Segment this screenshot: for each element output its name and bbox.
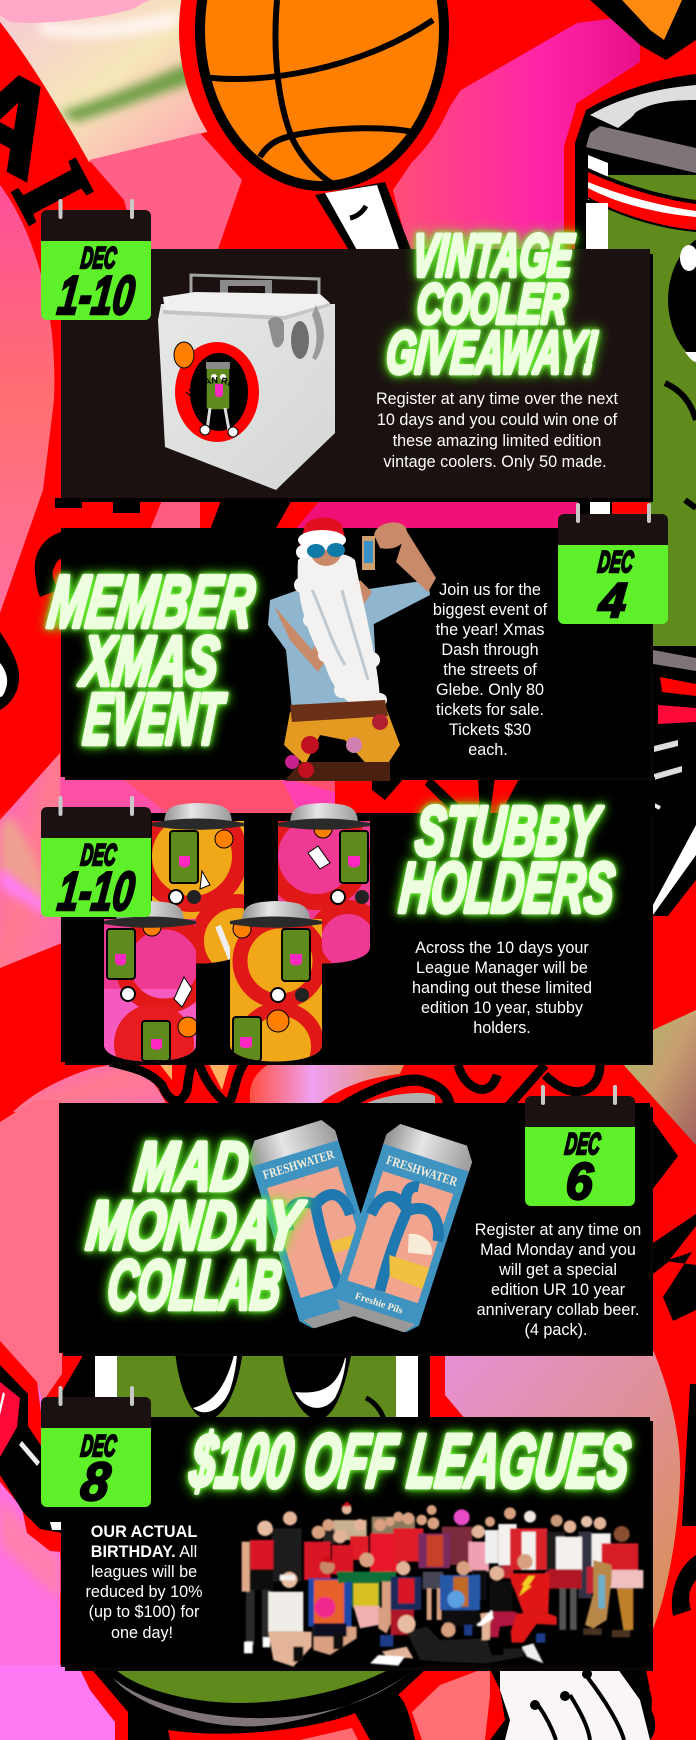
panel 3 background	[61, 813, 653, 1065]
title: vintage cooler giveaway: COOLER	[415, 272, 570, 335]
background left of panel 5	[0, 1341, 62, 1740]
calendar: dec 6: DEC	[563, 1128, 603, 1161]
text: cooler description: Register at any time over the next	[376, 390, 619, 408]
title: member xmas event	[44, 560, 260, 760]
calendar: dec 6	[525, 1085, 635, 1211]
front row left	[242, 1511, 353, 1653]
text: xmas description: Join us for the	[439, 581, 541, 599]
text: stubby description: League Manager will be	[416, 959, 588, 977]
mascot can top right	[564, 62, 696, 655]
panel 2 background	[61, 528, 653, 780]
image: stubby holder back left	[152, 803, 244, 964]
background top right shape	[590, 0, 696, 60]
text: mad monday description	[475, 1221, 641, 1339]
image: beer can left: FRESHWATER	[261, 1146, 336, 1182]
text: birthday description: OUR ACTUAL	[91, 1523, 197, 1541]
text: birthday description: one day!	[111, 1624, 173, 1642]
image: team group photo	[242, 1501, 643, 1667]
background magenta area right	[393, 15, 640, 252]
calendar: dec 1-10	[41, 796, 151, 922]
text: cooler description: these amazing limited edition	[393, 432, 601, 450]
background right of panel 5	[640, 1384, 696, 1740]
background gap 2-3	[60, 753, 655, 815]
calendar: dec 8: DEC	[79, 1430, 119, 1463]
text: birthday description: leagues will be	[91, 1563, 197, 1581]
text: mad monday description: will get a special	[498, 1261, 617, 1279]
text: xmas description: biggest event of	[433, 601, 548, 619]
logo on cooler: URBAN REC	[186, 376, 230, 396]
image: beer can right	[330, 1121, 476, 1336]
title: member xmas event: MEMBER	[44, 560, 260, 643]
text: stubby description: holders.	[473, 1019, 531, 1037]
text: mad monday description: edition UR 10 year	[491, 1281, 626, 1299]
text: cooler description: 10 days and you could win one of	[377, 411, 618, 429]
text: cooler description: vintage coolers. Only 50 made.	[383, 453, 607, 471]
logo on cooler	[174, 342, 259, 442]
background right swirl	[621, 1010, 696, 1145]
text: mad monday description: Register at any time on	[475, 1221, 641, 1239]
title: member xmas event: EVENT	[81, 679, 229, 760]
mascot arc left of panel 2	[35, 532, 62, 597]
background left pink	[0, 185, 54, 613]
text: stubby description	[412, 939, 592, 1037]
text: birthday description: BIRTHDAY. All	[91, 1543, 197, 1561]
panel: $100 off leagues	[41, 1386, 653, 1671]
background right of panel 2	[600, 646, 696, 1050]
image: stubby holder front right	[230, 901, 322, 1062]
text: stubby description: handing out these limited	[412, 979, 592, 997]
mascot finger	[315, 182, 412, 252]
text: mad monday description: Mad Monday and you	[480, 1241, 636, 1259]
background left of panel 4	[0, 1100, 62, 1400]
icon: vintage cooler	[158, 274, 335, 490]
title: mad monday collab	[83, 1127, 309, 1324]
calendar: dec 1-10: 1-10	[55, 264, 138, 326]
calendar: dec 4: 4	[596, 574, 629, 628]
calendar: dec 1-10: DEC	[79, 839, 119, 872]
text: mad monday description: anniverary collab beer.	[477, 1301, 639, 1319]
calendar: dec 6: 6	[564, 1153, 595, 1211]
front row right	[489, 1526, 643, 1643]
text: xmas description: tickets for sale.	[436, 701, 544, 719]
background bottom mascot	[0, 1665, 652, 1740]
text: birthday description	[86, 1523, 202, 1642]
mascot glove left	[0, 632, 19, 710]
panel: member xmas event	[44, 503, 668, 781]
calendar: dec 1-10	[41, 199, 151, 326]
title: member xmas event: XMAS	[76, 621, 223, 700]
basketball	[179, 0, 465, 200]
text: birthday description: (up to $100) for	[89, 1603, 200, 1621]
text: xmas description: each.	[468, 741, 508, 759]
background swirl top left	[0, 0, 215, 162]
image: santa man	[268, 518, 436, 781]
text: cooler description	[376, 390, 619, 471]
text: stubby description: Across the 10 days your	[415, 939, 589, 957]
mascot eye right	[665, 232, 696, 508]
title: mad monday collab: MAD	[131, 1127, 253, 1205]
text: xmas description: Glebe. Only 80	[436, 681, 544, 699]
text: xmas description: the year! Xmas	[436, 621, 544, 639]
image: stubby holder front left	[104, 901, 196, 1062]
background pink wedge	[89, 133, 242, 252]
text: stubby description: edition 10 year, stubby	[421, 999, 584, 1017]
panel 4 background	[59, 1103, 653, 1356]
background gap 1-2	[55, 498, 650, 530]
image: beer can right: FRESHWATER	[384, 1152, 460, 1189]
background left of panel 3	[0, 753, 62, 968]
calendar: dec 1-10: DEC	[79, 242, 119, 275]
text: birthday description: reduced by 10%	[86, 1583, 202, 1601]
title: vintage cooler giveaway	[384, 222, 600, 386]
front row centre	[268, 1553, 480, 1667]
back row	[322, 1501, 611, 1630]
text: xmas description: Dash through	[441, 641, 539, 659]
lying girl	[370, 1610, 543, 1666]
mascot can centre	[44, 1350, 680, 1629]
panel: mad monday collab	[59, 1085, 653, 1356]
text: xmas description: Tickets $30	[449, 721, 531, 739]
panel 1 background	[61, 249, 653, 502]
calendar: dec 4: DEC	[596, 546, 636, 579]
title: vintage cooler giveaway: VINTAGE	[410, 222, 577, 289]
panel 5 background	[61, 1417, 653, 1671]
text: xmas description: the streets of	[443, 661, 537, 679]
image: beer can right: Freshie Pils	[353, 1291, 404, 1317]
panel: vintage cooler giveaway	[41, 199, 653, 502]
title: mad monday collab: MONDAY	[83, 1186, 309, 1264]
text: xmas description	[433, 581, 548, 759]
calendar: dec 8: 8	[77, 1452, 114, 1512]
title: stubby holders	[397, 792, 618, 928]
calendar: dec 4	[558, 503, 668, 628]
background gap 3-4	[13, 1062, 600, 1112]
image: stubby holder back right	[278, 803, 370, 964]
text: mad monday description: (4 pack).	[525, 1321, 587, 1339]
background right of panel 4	[652, 1120, 696, 1321]
background letters on red band	[0, 39, 115, 237]
image: beer can left	[245, 1117, 389, 1332]
panel: stubby holders	[41, 792, 653, 1085]
calendar: dec 1-10: 1-10	[55, 860, 138, 922]
title: mad monday collab: COLLAB	[105, 1246, 285, 1324]
calendar: dec 8	[41, 1386, 151, 1512]
